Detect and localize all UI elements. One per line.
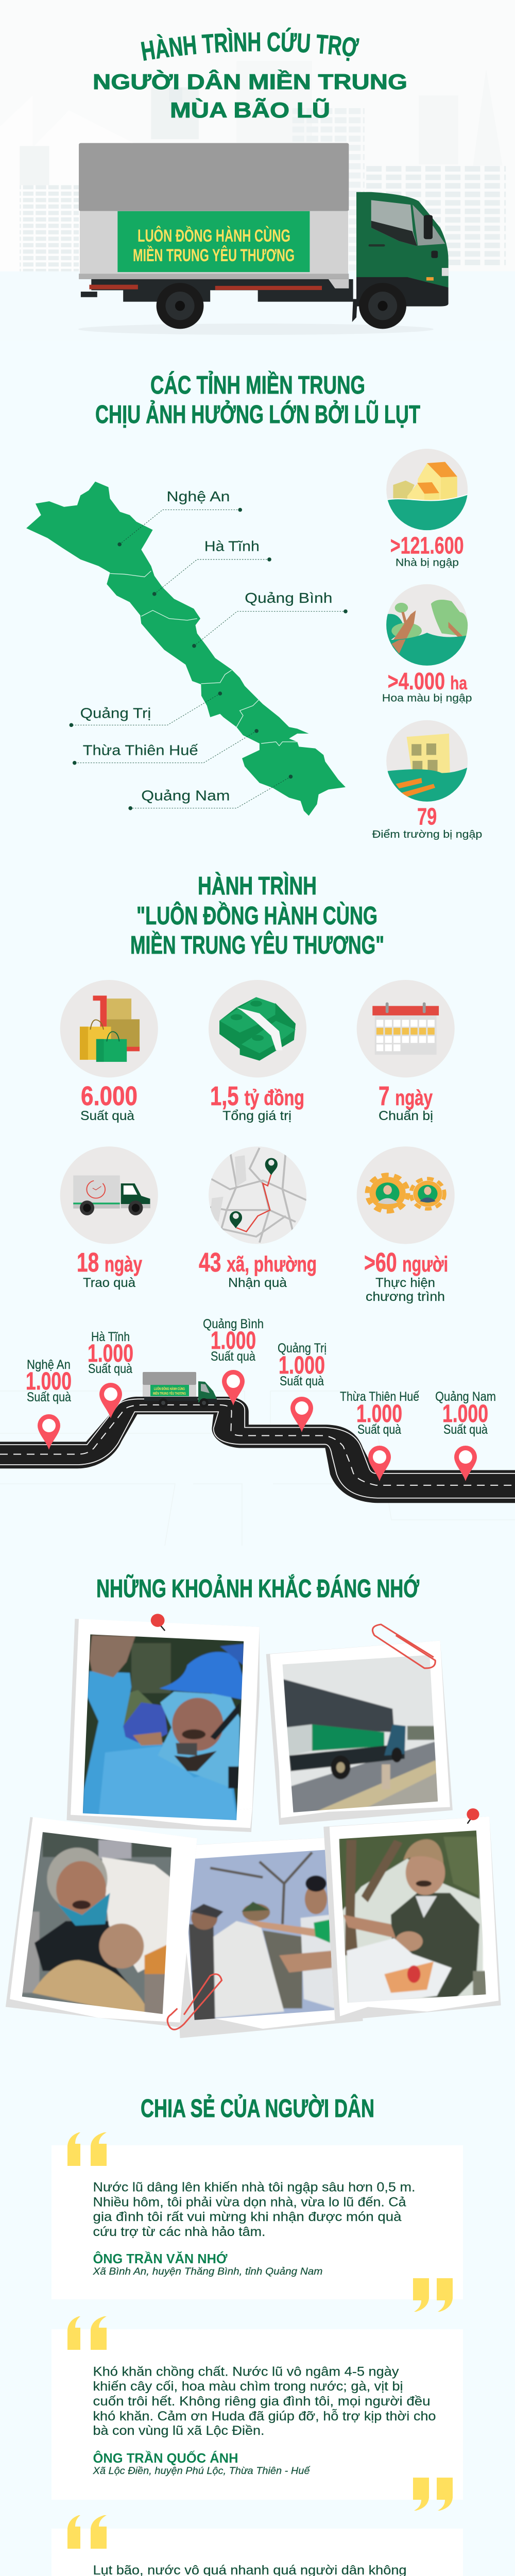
stat: total value xyxy=(210,1081,304,1123)
icon: red pin 2 xyxy=(467,1808,479,1824)
map of central provinces xyxy=(26,482,348,816)
stat: crops flooded: Hoa màu bị ngập xyxy=(382,692,472,704)
map label: Nghệ An xyxy=(117,488,242,546)
stat: communes: 43 xã, phường xyxy=(199,1248,317,1278)
journey statistics grid xyxy=(60,980,455,1304)
stat: staff: Thực hiện xyxy=(375,1276,435,1290)
map label: Quảng Bình: Quảng Bình xyxy=(245,590,332,606)
stop: Quảng Nam xyxy=(435,1389,496,1481)
quote text xyxy=(93,2365,436,2438)
quote text: gia đình tôi rất vui mừng khi nhận được món quà xyxy=(93,2210,402,2224)
icon: flooded school xyxy=(384,720,470,803)
quote text: cuốn trôi hết. Không riêng gia đình tôi, mọi người đều xyxy=(93,2394,431,2409)
quote text: Khó khăn chồng chất. Nước lũ vô ngâm 4-5 ngày xyxy=(93,2365,399,2379)
close quote mark xyxy=(413,2278,453,2312)
icon: gift bags xyxy=(60,980,158,1077)
stat: staff: chương trình xyxy=(366,1290,445,1304)
map label: Quảng Trị: Quảng Trị xyxy=(80,705,151,721)
mini truck on road: MIỀN TRUNG YÊU THƯƠNG xyxy=(153,1391,186,1396)
stop: Thừa Thiên Huế: Suất quà xyxy=(357,1422,401,1437)
stop: Quảng Nam: Quảng Nam xyxy=(435,1389,496,1404)
stat: schools flooded xyxy=(372,803,482,840)
stat: staff xyxy=(364,1248,448,1304)
quote text: khiến cây cối, hoa màu chìm trong nước; gà, vịt bị xyxy=(93,2379,403,2394)
open quote mark xyxy=(67,2515,107,2549)
truck illustration xyxy=(78,143,449,335)
flood statistics xyxy=(372,449,482,840)
stop: Hà Tĩnh: 1.000 xyxy=(88,1340,133,1367)
heading: the journey: MIỀN TRUNG YÊU THƯƠNG" xyxy=(130,931,384,959)
stop: Quảng Trị: Suất quà xyxy=(280,1374,324,1388)
stat: houses flooded xyxy=(390,532,464,569)
stop: Quảng Trị: 1.000 xyxy=(279,1352,325,1379)
heading: affected provinces: CÁC TỈNH MIỀN TRUNG xyxy=(150,371,365,399)
stop: Nghệ An: Nghệ An xyxy=(27,1358,71,1372)
stop: Hà Tĩnh xyxy=(88,1330,133,1418)
speaker name: ÔNG TRẦN QUỐC ÁNH xyxy=(93,2450,238,2466)
stop: Thừa Thiên Huế: 1.000 xyxy=(356,1400,402,1428)
map label: Nghệ An: Nghệ An xyxy=(166,488,230,504)
close quote mark xyxy=(413,2478,453,2511)
icon: flooded houses xyxy=(384,449,470,532)
stat: schools flooded: Điểm trường bị ngập xyxy=(372,829,482,840)
stop: Quảng Bình: Suất quà xyxy=(211,1349,255,1364)
icon: route map xyxy=(209,1146,309,1246)
stop: Quảng Nam: 1.000 xyxy=(442,1400,488,1428)
stat: delivery days: 18 ngày xyxy=(77,1248,142,1278)
stat: preparation: Chuẩn bị xyxy=(379,1109,433,1123)
title line 3: MÙA BÃO LŨ xyxy=(170,97,330,122)
truck banner text: LUÔN ĐỒNG HÀNH CÙNG xyxy=(138,226,290,246)
stop: Nghệ An: Suất quà xyxy=(27,1390,71,1404)
heading: the journey: "LUÔN ĐỒNG HÀNH CÙNG xyxy=(136,902,377,930)
quote text xyxy=(93,2180,415,2239)
map label: Quảng Nam: Quảng Nam xyxy=(141,787,230,803)
stop: Quảng Bình: 1.000 xyxy=(211,1327,256,1354)
title line 1 on arc: HÀNH TRÌNH CỨU TRỢ xyxy=(141,27,359,61)
stat: houses flooded: Nhà bị ngập xyxy=(396,557,459,569)
map label: Quảng Nam xyxy=(128,775,293,810)
photo: man in blue raincoat xyxy=(66,1619,260,1832)
icon: money stacks xyxy=(209,980,306,1077)
photo: volunteers handing gift bag xyxy=(171,1837,363,2038)
speaker name: ÔNG TRẦN VĂN NHỚ xyxy=(93,2251,228,2266)
speaker location: Xã Lộc Điền, huyện Phú Lộc, Thừa Thiên - Huế xyxy=(92,2466,311,2477)
photo collage xyxy=(6,1614,501,2038)
stat: crops flooded xyxy=(382,668,472,704)
stop: Thừa Thiên Huế xyxy=(340,1389,419,1481)
mini truck on road xyxy=(143,1372,217,1408)
truck banner text xyxy=(133,226,295,265)
icon: paperclip 1 xyxy=(372,1624,435,1668)
stat: preparation: 7 ngày xyxy=(379,1081,433,1111)
stat: staff: >60 người xyxy=(364,1248,448,1278)
photo: relief truck xyxy=(266,1641,453,1825)
stop: Quảng Nam: Suất quà xyxy=(443,1422,488,1437)
stat: total value: Tổng giá trị xyxy=(222,1109,291,1123)
quote card 1 xyxy=(52,2132,463,2312)
stop: Hà Tĩnh: Hà Tĩnh xyxy=(91,1330,130,1344)
stop: Quảng Bình: Quảng Bình xyxy=(203,1317,264,1331)
map label: Hà Tĩnh xyxy=(152,538,271,596)
stat: crops flooded: >4.000 ha xyxy=(388,668,468,694)
quote card 2 xyxy=(52,2316,463,2511)
photo: elderly woman with bag xyxy=(6,1817,197,2027)
icon: red pin 1 xyxy=(151,1614,165,1631)
quote text: Nước lũ dâng lên khiến nhà tôi ngập sâu hơn 0,5 m. xyxy=(93,2180,415,2195)
heading: the journey xyxy=(130,872,384,959)
stat: houses flooded: >121.600 xyxy=(390,532,464,558)
road xyxy=(0,1397,515,1503)
stat: delivery days xyxy=(77,1248,142,1290)
icon: people in gears xyxy=(357,1146,455,1244)
icon: calendar xyxy=(357,980,455,1077)
map label: Hà Tĩnh: Hà Tĩnh xyxy=(204,538,260,554)
open quote mark xyxy=(67,2132,107,2166)
stat: gifts: 6.000 xyxy=(81,1081,138,1111)
stat: communes xyxy=(199,1248,317,1290)
stop: Thừa Thiên Huế: Thừa Thiên Huế xyxy=(340,1389,419,1404)
map label: Quảng Bình xyxy=(192,590,348,648)
heading: residents' stories: CHIA SẺ CỦA NGƯỜI DÂN xyxy=(141,2094,374,2123)
quote text: Nhiều hôm, tôi phải vừa dọn nhà, vừa lo lũ đến. Cả xyxy=(93,2195,406,2209)
route stops with gift counts xyxy=(26,1317,496,1481)
faint road background lines xyxy=(0,1391,515,1546)
truck banner text: MIỀN TRUNG YÊU THƯƠNG xyxy=(133,246,295,265)
stat: schools flooded: 79 xyxy=(417,803,437,830)
stat: delivery days: Trao quà xyxy=(83,1276,135,1290)
quote card 3 xyxy=(52,2515,463,2576)
stat: communes: Nhận quà xyxy=(228,1276,287,1290)
stop: Quảng Bình xyxy=(203,1317,264,1405)
title xyxy=(93,27,407,122)
map label: Thừa Thiên Huế: Thừa Thiên Huế xyxy=(83,742,198,758)
stat: preparation xyxy=(379,1081,433,1123)
icon: flooded crops xyxy=(384,584,470,668)
stat: gifts xyxy=(80,1081,138,1123)
map label: Thừa Thiên Huế xyxy=(73,729,259,765)
heading: the journey: HÀNH TRÌNH xyxy=(198,872,317,900)
stop: Hà Tĩnh: Suất quà xyxy=(88,1362,132,1376)
stop: Nghệ An: 1.000 xyxy=(26,1368,72,1395)
stop: Quảng Trị: Quảng Trị xyxy=(278,1341,327,1355)
icon: paperclip 2 xyxy=(167,1974,222,2029)
mini truck on road: LUÔN ĐỒNG HÀNH CÙNG xyxy=(154,1386,185,1391)
map label: Quảng Trị xyxy=(70,691,222,727)
header skyline background xyxy=(0,0,515,341)
photo: elderly man receiving gift xyxy=(323,1817,501,2021)
icon: delivery truck with clock xyxy=(60,1146,158,1244)
stop: Quảng Trị xyxy=(278,1341,327,1432)
stat: total value: 1,5 tỷ đồng xyxy=(210,1081,304,1111)
heading: affected provinces xyxy=(95,371,420,429)
quote text: cứu trợ từ các nhà hảo tâm. xyxy=(93,2225,266,2239)
title line 2: NGƯỜI DÂN MIỀN TRUNG xyxy=(93,69,407,94)
open quote mark xyxy=(67,2316,107,2350)
quote text: khó khăn. Cảm ơn Huda đã giúp đỡ, hỗ trợ kịp thời cho xyxy=(93,2409,436,2424)
speaker location: Xã Bình An, huyện Thăng Bình, tỉnh Quảng Nam xyxy=(92,2266,322,2277)
stop: Nghệ An xyxy=(26,1358,72,1450)
quote text: bà con vùng lũ xã Lộc Điền. xyxy=(93,2424,265,2438)
stat: gifts: Suất quà xyxy=(80,1109,134,1123)
